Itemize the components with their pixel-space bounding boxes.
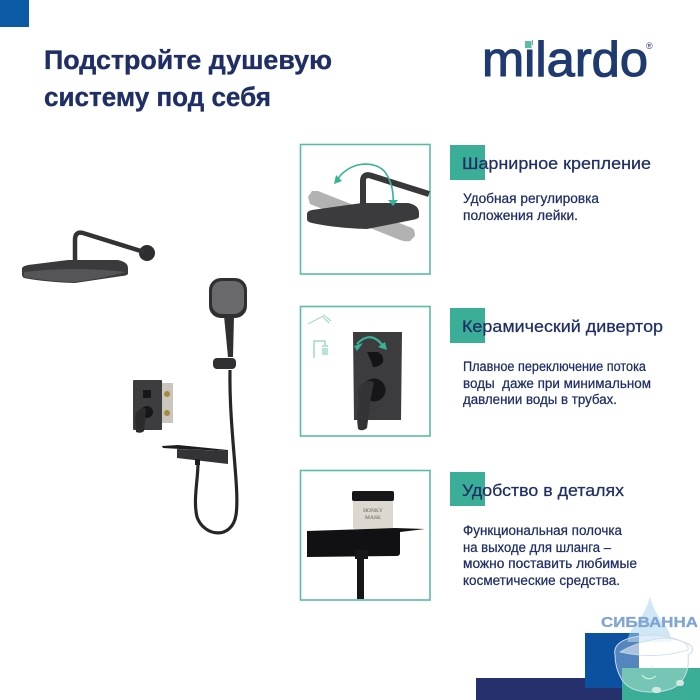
- heading: Шарнирное крепление: [462, 154, 651, 173]
- description: можно поставить любимые: [463, 556, 637, 571]
- heading block: ceramic diverter: [450, 308, 663, 407]
- teal square: [450, 145, 485, 180]
- shower head: [307, 203, 419, 229]
- heading block: swivel mount: [450, 145, 651, 223]
- description: [463, 191, 599, 223]
- heading: Керамический дивертор: [462, 317, 663, 336]
- frame: [300, 306, 430, 436]
- cosmetics jar: [352, 491, 394, 529]
- bathtub: [615, 635, 693, 693]
- panel: ceramic diverter image: [300, 306, 430, 436]
- overhead shower: [22, 233, 155, 283]
- lower knob: [362, 378, 386, 402]
- title: Подстройте душевую: [44, 45, 332, 75]
- heading: Удобство в деталях: [462, 481, 625, 500]
- description: [463, 523, 637, 588]
- upper knob: [367, 352, 383, 367]
- logo: milardo: ®: [646, 41, 653, 51]
- frame: [300, 144, 430, 274]
- corner accent: [0, 0, 29, 27]
- title: [44, 45, 332, 112]
- frame: [300, 470, 430, 600]
- panel: shelf image: [300, 470, 430, 600]
- cosmetics jar: HONKY: [363, 508, 383, 514]
- shelf with hose outlet: [162, 445, 228, 465]
- hand shower: [195, 278, 247, 533]
- mixer valve: [133, 380, 173, 433]
- diverter arrow: [354, 337, 387, 351]
- description: [463, 359, 651, 407]
- tilted head ghost: [308, 191, 415, 241]
- description: положения лейки.: [463, 208, 578, 223]
- heading block: details: [450, 472, 637, 588]
- description: косметические средства.: [463, 573, 620, 588]
- teal square: [450, 472, 485, 506]
- cosmetics jar: MASK: [365, 515, 381, 521]
- description: Плавное переключение потока: [463, 359, 646, 374]
- description: давлении воды в трубах.: [463, 392, 617, 407]
- shelf: [307, 528, 425, 557]
- lever handle: [357, 381, 374, 430]
- description: Функциональная полочка: [463, 523, 622, 538]
- product: full shower set: [22, 233, 247, 533]
- arm: [363, 175, 429, 205]
- icon: hand shower: [314, 341, 328, 358]
- title: систему под себя: [44, 82, 271, 112]
- description: на выходе для шланга –: [463, 540, 611, 555]
- corner blocks: [476, 633, 700, 700]
- hose: [355, 550, 368, 599]
- watermark: Сибванна: [601, 597, 699, 693]
- watermark text: СИБВАННА: [601, 615, 699, 631]
- mixer plate: [353, 332, 402, 420]
- description: Удобная регулировка: [463, 191, 599, 206]
- panel: swivel mount image: [300, 144, 430, 274]
- description: воды даже при минимальном: [463, 376, 651, 391]
- rotation arrow: [334, 164, 398, 206]
- water drop: [628, 597, 671, 642]
- icon: overhead shower: [308, 315, 331, 324]
- logo: milardo: milardo: [482, 33, 648, 87]
- teal square: [450, 308, 485, 343]
